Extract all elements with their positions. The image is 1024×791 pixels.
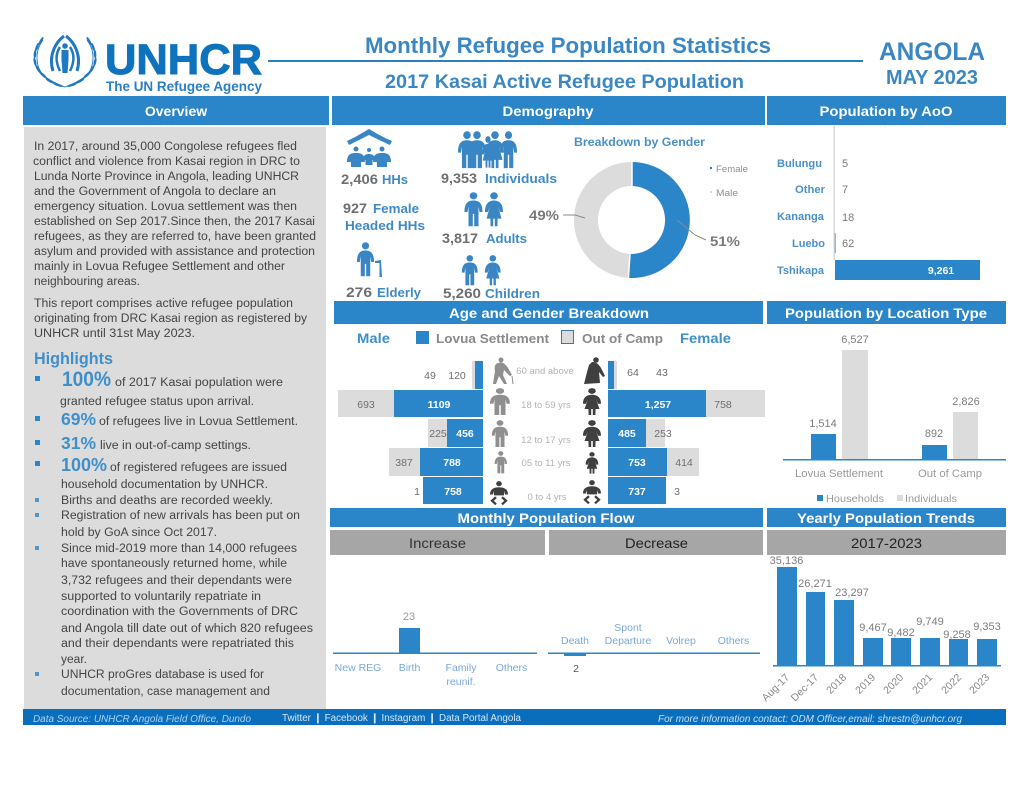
stat: elderly [346,284,422,300]
stat: households: HHs [382,172,408,187]
header: Population by AoO [767,96,1006,125]
bar chart: population decrease: 2 [573,663,579,675]
highlights list: granted refugee status upon arrival. [60,396,254,408]
header: Population by Location Type [767,301,1006,324]
bar chart: population by AoO: Other [795,184,826,196]
chart heading: breakdown by gender: Breakdown by Gender [574,135,705,149]
icon: elderly [357,242,382,277]
tagline: The UN Refugee Agency [106,78,262,94]
bar chart: population by AoO: Tshikapa [777,265,825,277]
pyramid chart: female bars: 414 [675,457,693,469]
pyramid chart: male bars: 456 [456,428,474,440]
icon: UNHCR emblem [33,36,97,88]
stat: households [341,171,408,187]
icon: households [347,129,392,167]
header: Monthly Population Flow: Monthly Population Flow [458,510,635,526]
bar chart: population increase: 23 [403,611,415,623]
label: male share: 49% [529,207,560,223]
highlights list: year. [61,654,87,666]
date: MAY 2023 [886,67,978,89]
stat: female headed households: 927 [343,200,367,216]
stat: adults [442,230,527,246]
donut chart: gender [529,162,741,278]
highlights list: 100% [62,368,111,391]
highlights list: supported to voluntarily repatriate in [61,591,261,603]
highlights list: of refugees live in Lovua Settlement. [99,416,298,428]
highlights list: 31% [61,433,96,453]
bar chart: population by AoO: 7 [842,184,848,196]
overview paragraph: refugees, as they are referred to, have been granted [34,231,316,243]
age group labels: 05 to 11 yrs [522,458,571,469]
bar chart: population decrease: Volrep [666,635,696,647]
highlights list: 100% [61,455,107,475]
header: Population by Location Type: Population by Location Type [785,305,987,321]
bar chart: population by AoO: Bulungu [777,158,822,170]
pyramid chart: male bars: 693 [357,399,375,411]
bar chart: yearly population trends: 9,258 [943,629,971,641]
bar chart: population by location type: 6,527 [841,334,869,346]
pyramid chart: female bars: 43 [656,367,668,379]
leader lines [563,215,706,240]
bar chart: population decrease [548,622,760,675]
pyramid chart: male bars: 120 [448,370,466,382]
stat: elderly: Elderly [377,285,422,300]
header: Overview: Overview [145,103,207,119]
stat: individuals: Individuals [485,171,557,186]
stat: elderly: 276 [346,284,372,300]
age group labels [516,366,574,503]
pyramid chart: female bars: 485 [618,428,636,440]
highlights list: of registered refugees are issued [110,462,287,474]
pyramid chart: female bars [608,361,765,504]
location legend: Individuals [905,493,957,505]
stat: individuals: 9,353 [441,170,477,186]
stat: children: 5,260 [443,285,481,301]
highlights list: Registration of new arrivals has been put on [61,510,300,522]
pyramid chart: female bars: 3 [674,486,680,498]
bar chart: yearly population trends: Dec-17 [789,672,821,704]
header: Monthly Population Flow [330,508,763,527]
subheader: 2017-2023: 2017-2023 [851,535,922,551]
overview paragraph: mainly in Lovua Refugee Settlement and other [34,261,285,273]
highlights list: UNHCR proGres database is used for [61,669,264,681]
bar chart: population by AoO: 62 [842,238,854,250]
highlights list: live in out-of-camp settings. [100,440,251,452]
pyramid chart: male bars: 758 [444,486,462,498]
bar chart: population increase: New REG [335,662,381,674]
header: Overview [23,96,329,125]
header: Age and Gender Breakdown: Age and Gender Breakdown [449,305,649,321]
subheader: 2017-2023 [767,530,1006,555]
bar chart: population by location type: Out of Camp [918,468,982,480]
title rule [268,60,863,62]
bar chart: yearly population trends: 35,136 [770,555,803,567]
bar chart: population by location type: 1,514 [809,418,837,430]
country: ANGOLA [879,38,985,66]
stat: female headed households: Female [373,201,419,216]
wordmark: UNHCR [105,36,262,84]
highlights list [35,368,313,698]
bar chart: population by AoO: 5 [842,158,848,170]
report scope paragraph: This report comprises active refugee population [34,298,293,310]
highlights list: 69% [61,409,96,429]
subheader: Decrease [549,530,763,555]
highlights list: Births and deaths are recorded weekly. [61,495,273,507]
title: Monthly Refugee Population Statistics [365,33,771,58]
highlights list: 3,732 refugees and their dependants were [61,575,292,587]
pyramid chart: female bars: 758 [714,399,732,411]
bar chart: yearly population trends: 9,482 [887,627,915,639]
bar chart: yearly population trends: 9,353 [973,621,1001,633]
overview paragraph: neighbouring areas. [34,276,140,288]
pyramid chart: male bars: 1 [414,486,420,498]
highlights list: household documentation by UNHCR. [61,479,268,491]
age group labels: 12 to 17 yrs [521,435,571,446]
pyramid chart: male bars [338,361,483,504]
age group labels: 60 and above [516,366,574,377]
header: Population by AoO: Population by AoO [820,103,953,119]
bar chart: yearly population trends: 9,749 [916,616,944,628]
header: Demography: Demography [502,103,594,119]
icons: male age groups [490,358,513,504]
bar chart: yearly population trends [760,555,1001,704]
overview paragraph: emergency situation. Lovua settlement was then [34,201,297,213]
bar chart: yearly population trends: 26,271 [798,578,832,590]
bar chart: population decrease: Others [718,635,749,647]
highlights list: and their dependants were repatriated this [61,638,294,650]
highlights list: have spontaneously returned home, while [61,558,287,570]
overview paragraph: and the Government of Angola to declare an [34,186,276,198]
bar chart: population by AoO [777,125,980,280]
pyramid chart: male bars: 1109 [428,399,451,411]
highlights list: hold by GoA since Oct 2017. [61,527,217,539]
bar chart: population by AoO: 9,261 [928,265,954,277]
highlights heading: Highlights [34,349,113,368]
bar chart: yearly population trends: Aug-17 [760,672,792,704]
panel: demography [341,129,748,301]
label: female share: 51% [710,233,741,249]
bar chart: yearly population trends: 2023 [967,672,992,697]
footer [23,709,1006,725]
pyramid chart: male bars: 49 [424,370,436,382]
bar chart: population by AoO: Luebo [792,238,825,250]
report scope paragraph: originating from DRC Kasai region as registered by [34,313,307,325]
bar chart: population increase: Family [446,662,477,674]
age and gender legend: Female [680,330,731,346]
bar chart: population by location type: Lovua Settlement [795,468,883,480]
bar chart: yearly population trends: 2022 [939,672,964,697]
location legend: Households [826,493,884,505]
stat: female headed households [343,200,425,233]
highlights list: Since mid-2019 more than 14,000 refugees [61,543,297,555]
pyramid chart: male bars: 225 [429,428,447,440]
header: Yearly Population Trends [767,508,1006,527]
bar chart: yearly population trends: 9,467 [859,622,887,634]
overview paragraph [33,141,316,288]
subheader: Increase [330,530,545,555]
age and gender legend: Out of Camp [582,331,663,346]
bar chart: population by AoO: 18 [842,212,854,224]
stat: adults: 3,817 [442,230,478,246]
overview paragraph: established on Sep 2017.Since then, the 2017 Kasai [34,216,315,228]
stat: children [443,285,540,301]
icon: children [462,255,501,285]
social links: Twitter ❙ Facebook ❙ Instagram ❙ Data Portal Angola [282,713,521,724]
pyramid chart: female bars: 253 [654,428,672,440]
icons: female age groups [583,357,605,503]
bar chart: yearly population trends: 2019 [853,672,878,697]
bar chart: population by AoO: Kananga [777,211,825,223]
stat: individuals [441,170,557,186]
bar chart: population by location type: 892 [925,428,943,440]
pyramid chart: female bars: 737 [628,486,646,498]
stat: households: 2,406 [341,171,378,187]
bar chart: population decrease: Spont [614,622,642,634]
pyramid chart: female bars: 64 [627,367,639,379]
subheader: Decrease: Decrease [625,535,688,551]
age and gender legend: Lovua Settlement [436,331,550,346]
bar chart: yearly population trends: 2020 [881,672,906,697]
report scope paragraph: UNHCR until 31st May 2023. [34,328,195,340]
age and gender legend [357,330,731,346]
stat: children: Children [485,286,540,301]
data source: Data Source: UNHCR Angola Field Office, Dundo [33,714,251,725]
header: Demography [332,96,765,125]
location legend [817,493,957,505]
bar chart: population increase [333,611,537,688]
bar chart: yearly population trends: 2021 [910,672,935,697]
stat: adults: Adults [486,231,527,246]
bar chart: population increase: Birth [399,662,420,674]
header: Yearly Population Trends: Yearly Population Trends [797,510,975,526]
overview paragraph: conflict and violence from Kasai region in DRC to [33,156,300,168]
subtitle: 2017 Kasai Active Refugee Population [385,71,744,93]
overview paragraph: asylum and provided with assistance and protection [34,246,315,258]
bar chart: yearly population trends: 2018 [824,672,849,697]
bar chart: population by location type: 2,826 [952,396,980,408]
bar chart: population decrease: Departure [605,635,652,647]
highlights list: of 2017 Kasai population were [115,377,283,389]
pyramid chart: female bars: 1,257 [645,399,671,411]
report scope paragraph [34,298,307,340]
overview paragraph: In 2017, around 35,000 Congolese refugees fled [34,141,297,153]
stat: female headed households: Headed HHs [345,218,425,233]
contact: For more information contact: ODM Officer,email: shrestn@unhcr.org [658,714,962,725]
age and gender legend: Male [357,330,390,346]
age group labels: 0 to 4 yrs [527,492,567,503]
age group labels: 18 to 59 yrs [521,400,571,411]
panel: overview text [24,127,326,709]
pyramid chart: male bars: 788 [443,457,461,469]
highlights list: documentation, case management and [61,686,270,698]
overview paragraph: Lunda Norte Province in Angola, leading UNHCR [34,171,299,183]
highlights list: coordination with the Governments of DRC [61,606,298,618]
icon: individuals [458,131,517,168]
gender legend [710,164,748,198]
gender legend: Female [716,164,748,174]
gender legend: Male [716,188,738,198]
subheader: Increase: Increase [409,535,466,551]
bar chart: population increase: reunif. [446,676,476,688]
header: Age and Gender Breakdown [334,301,763,324]
bar chart: population decrease: Death [561,635,589,647]
bar chart: population by location type [783,334,1006,505]
logo: UNHCR [33,36,262,94]
icon: adults [464,192,503,226]
pyramid chart: female bars: 753 [628,457,646,469]
pyramid chart: male bars: 387 [395,457,413,469]
highlights list: and Angola till date out of which 820 refugees [61,623,313,635]
bar chart: yearly population trends: 23,297 [835,587,869,599]
bar chart: population increase: Others [496,662,527,674]
